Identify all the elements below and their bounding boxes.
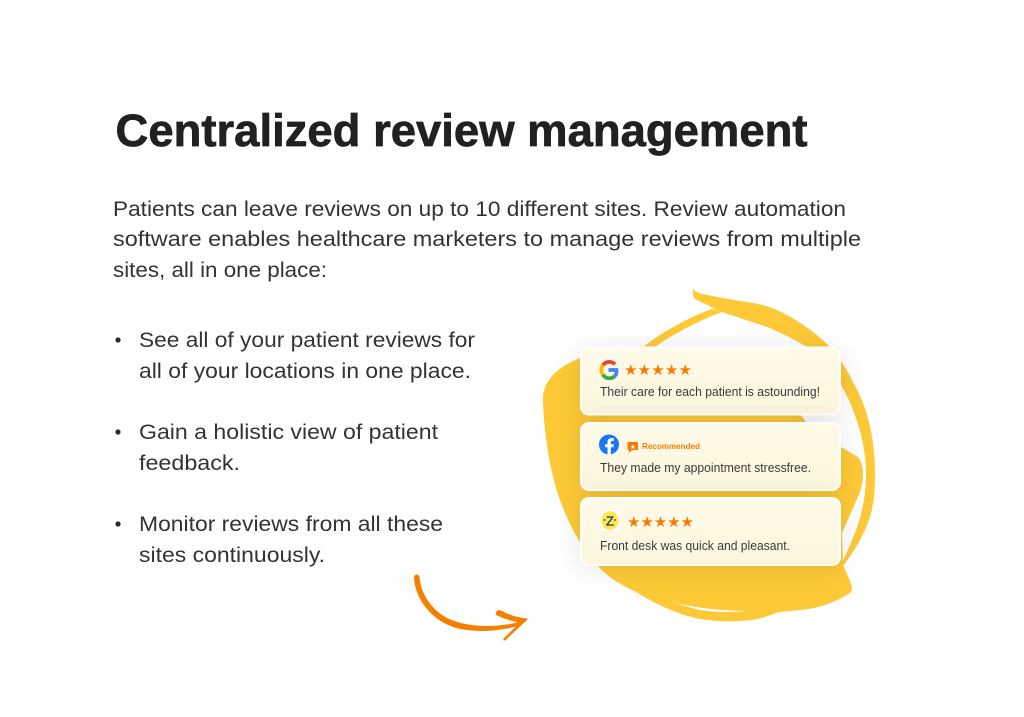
review card: Facebook	[581, 423, 840, 490]
bullet: monitor reviews: sites continuously.	[139, 544, 325, 567]
star rating: ★★★★★	[627, 513, 694, 531]
icon: Google G	[601, 362, 617, 378]
intro paragraph: Patients can leave reviews on up to 10 different sites. Review automation	[113, 198, 846, 221]
icon: Facebook	[599, 434, 619, 454]
review text: They made my appointment stressfree.	[600, 461, 811, 475]
icon: Zocdoc: Z	[606, 514, 614, 528]
intro paragraph	[113, 198, 861, 282]
bullet: holistic view	[115, 421, 438, 475]
review card: Zocdoc	[581, 498, 840, 565]
bullet: see all reviews: See all of your patient reviews for	[139, 329, 475, 352]
illustration: review cards on yellow blob	[543, 289, 875, 621]
white sliver in blob	[672, 602, 748, 612]
icon: recommended badge	[628, 442, 638, 452]
bullet: see all reviews	[115, 329, 475, 383]
bullet: monitor reviews	[115, 513, 443, 567]
recommended label: Recommended	[642, 441, 700, 451]
intro paragraph: software enables healthcare marketers to manage reviews from multiple	[113, 228, 861, 251]
review text: Front desk was quick and pleasant.	[600, 539, 790, 553]
intro paragraph: sites, all in one place:	[113, 259, 327, 282]
yellow blob	[543, 289, 875, 621]
icon: Zocdoc	[601, 510, 620, 531]
icon: recommended badge: ★	[630, 443, 636, 451]
title: Centralized review management	[116, 105, 808, 156]
bullet: holistic view: feedback.	[139, 452, 240, 475]
review card: Google	[581, 348, 840, 414]
bullet: holistic view: Gain a holistic view of patient	[139, 421, 438, 444]
review text: Their care for each patient is astounding!	[600, 385, 820, 399]
arrow	[414, 574, 528, 641]
bullet: see all reviews: all of your locations in one place.	[139, 360, 471, 383]
bullet list	[115, 329, 475, 567]
bullet: monitor reviews: Monitor reviews from all these	[139, 513, 443, 536]
star rating: ★★★★★	[624, 361, 692, 379]
